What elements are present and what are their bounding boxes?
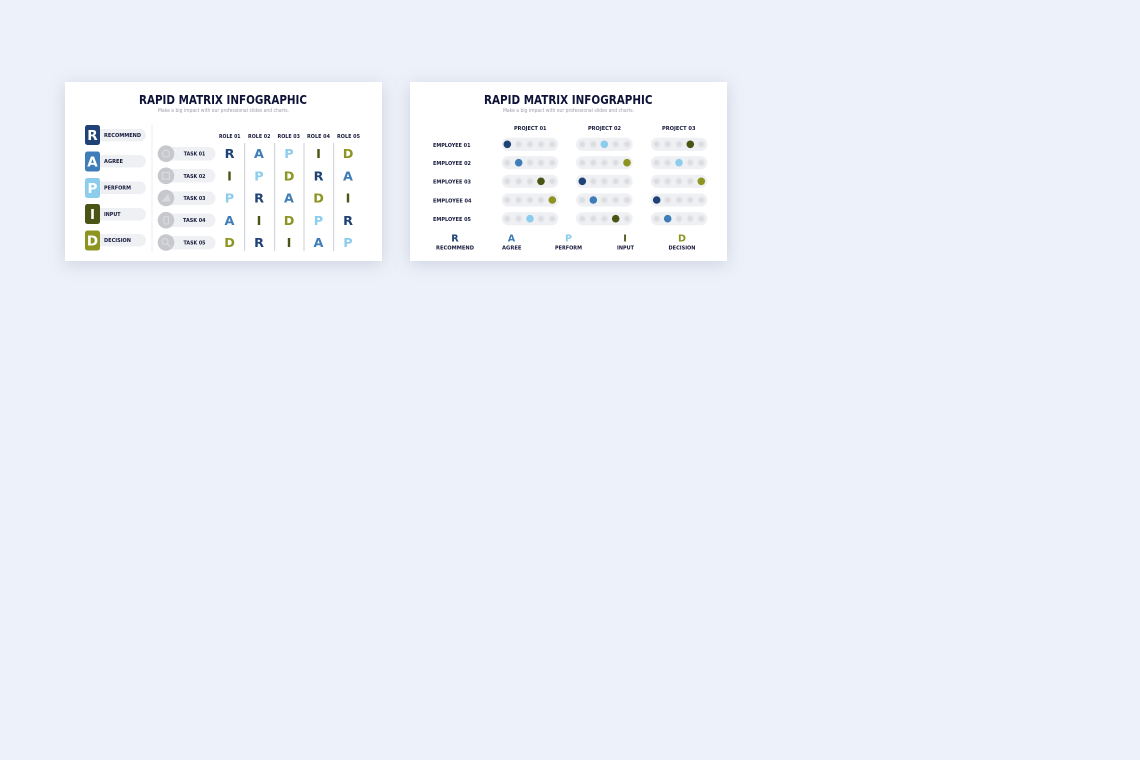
legend item: perform <box>85 178 146 198</box>
employee labels: EMPLOYEE 01 <box>433 143 471 149</box>
legend item: input: I <box>90 207 95 223</box>
employee labels <box>433 143 472 223</box>
legend item: input <box>85 204 146 224</box>
title: right panel: RAPID MATRIX INFOGRAPHIC <box>484 92 652 107</box>
matrix letters: I <box>316 147 321 162</box>
matrix letters: R <box>254 236 264 251</box>
matrix letters <box>224 147 353 251</box>
legend: decision: D <box>678 234 686 244</box>
legend item: agree: A <box>87 154 98 170</box>
matrix letters: D <box>343 147 353 162</box>
legend: input <box>617 234 634 252</box>
matrix letters: A <box>314 236 324 251</box>
legend: agree: A <box>508 234 516 244</box>
project headers <box>514 126 696 132</box>
dot matrix: project 01 <box>502 138 558 225</box>
project headers: PROJECT 02 <box>588 126 621 132</box>
matrix letters: D <box>313 192 324 207</box>
legend item: recommend: R <box>87 128 98 144</box>
employee labels: EMPLOYEE 05 <box>433 217 471 223</box>
matrix letters: I <box>227 170 232 184</box>
legend: perform: P <box>565 234 572 244</box>
project headers: PROJECT 03 <box>662 126 696 132</box>
matrix letters: A <box>343 170 353 184</box>
task 05: TASK 05 <box>184 240 206 246</box>
project headers: PROJECT 01 <box>514 126 547 132</box>
bottom legend <box>436 234 696 252</box>
task list <box>158 145 216 251</box>
matrix letters: R <box>343 214 353 229</box>
legend item: perform: P <box>88 181 98 197</box>
legend item: recommend <box>85 125 146 145</box>
matrix letters: P <box>284 147 294 162</box>
legend item: decision: DECISION <box>104 238 131 244</box>
matrix letters: P <box>343 236 353 251</box>
legend: perform: PERFORM <box>555 246 582 252</box>
legend: agree: AGREE <box>502 246 522 252</box>
task 03: TASK 03 <box>184 196 206 202</box>
legend: perform <box>555 234 582 252</box>
matrix letters: I <box>346 192 350 207</box>
legend item: agree <box>85 152 146 172</box>
matrix letters: I <box>287 236 291 251</box>
matrix letters: A <box>225 214 235 229</box>
employee labels: EMPLOYEE 04 <box>433 198 472 204</box>
panel: RAPID task role matrix <box>65 82 382 261</box>
matrix letters: R <box>314 170 324 184</box>
subtitle: left panel: Make a big impact with our professional slides and charts. <box>158 108 289 114</box>
matrix letters: R <box>254 192 264 207</box>
role headers: ROLE 01 <box>219 134 241 140</box>
legend: input: INPUT <box>617 246 634 252</box>
title: left panel: RAPID MATRIX INFOGRAPHIC <box>139 92 307 107</box>
legend item: recommend: RECOMMEND <box>104 133 142 139</box>
legend item: decision: D <box>87 234 98 250</box>
employee labels: EMPLOYEE 03 <box>433 180 471 186</box>
role headers: ROLE 03 <box>278 134 300 140</box>
dot matrix: project 03 <box>651 138 707 225</box>
legend item: agree: AGREE <box>104 159 123 165</box>
legend: agree <box>502 234 522 252</box>
role headers: ROLE 02 <box>248 134 271 140</box>
matrix letters: D <box>284 170 294 184</box>
employee labels: EMPLOYEE 02 <box>433 161 471 167</box>
role headers: ROLE 05 <box>337 134 360 140</box>
task 01: TASK 01 <box>184 152 206 158</box>
legend: recommend: R <box>451 234 459 244</box>
legend item: input: INPUT <box>104 212 121 218</box>
matrix letters: P <box>254 170 264 184</box>
task 04: TASK 04 <box>183 218 206 224</box>
legend: recommend <box>436 234 475 252</box>
legend item: decision <box>85 230 146 250</box>
legend: RAPID key <box>85 125 146 250</box>
matrix letters: P <box>225 192 234 207</box>
matrix letters: D <box>284 214 294 229</box>
legend item: perform: PERFORM <box>104 186 131 192</box>
dot matrix: project 02 <box>576 138 633 225</box>
legend: input: I <box>623 234 627 244</box>
legend: recommend: RECOMMEND <box>436 246 475 252</box>
panel: employee project matrix <box>410 82 727 261</box>
role headers <box>219 134 360 140</box>
matrix letters: A <box>284 192 294 207</box>
task 02: TASK 02 <box>184 174 206 180</box>
role headers: ROLE 04 <box>307 134 330 140</box>
legend: decision <box>668 234 696 252</box>
legend: decision: DECISION <box>668 246 696 252</box>
matrix letters: R <box>225 147 235 162</box>
matrix letters: A <box>254 147 264 162</box>
matrix letters: I <box>257 214 261 229</box>
matrix letters: P <box>314 214 323 229</box>
matrix letters: D <box>224 236 235 251</box>
subtitle: right panel: Make a big impact with our professional slides and charts. <box>503 108 634 114</box>
